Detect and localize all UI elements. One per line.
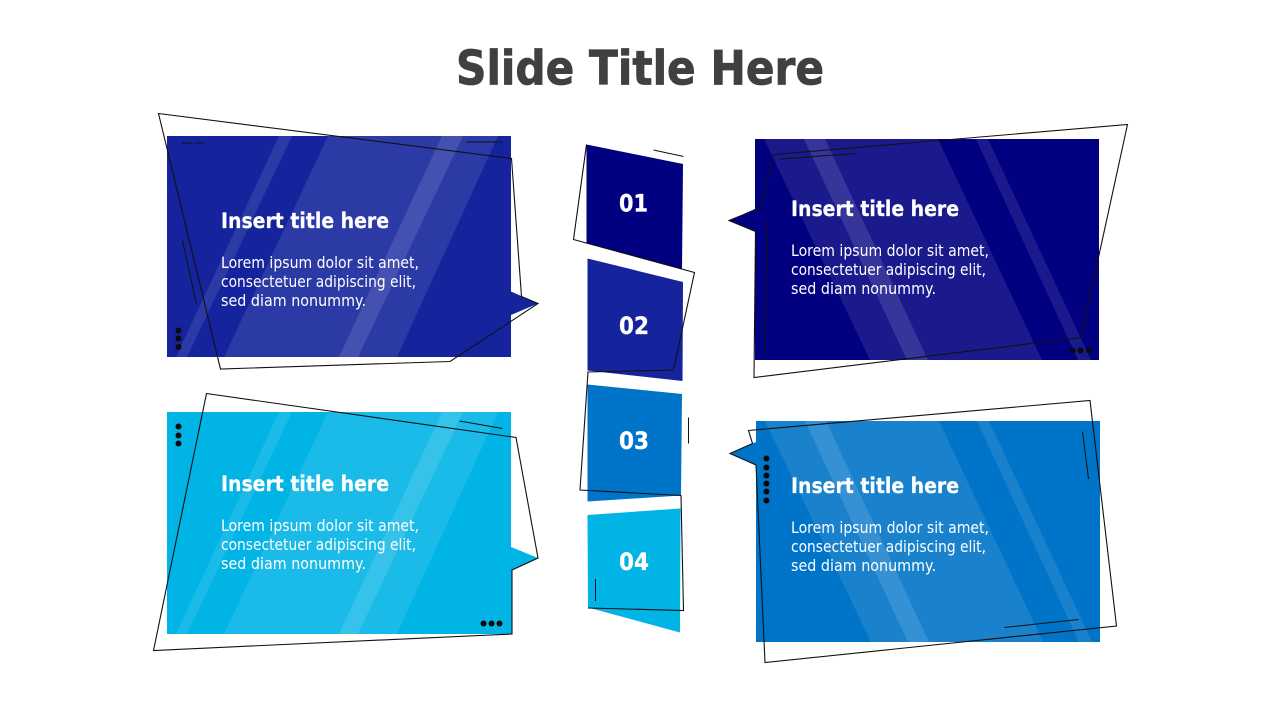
panel: top-left card	[158, 114, 538, 369]
card body text: sed diam nonummy.	[221, 291, 366, 310]
outline frame	[730, 400, 1116, 662]
glass bands	[176, 136, 498, 357]
accent lines	[765, 154, 855, 354]
outline frame	[154, 394, 538, 650]
card background with pointer	[167, 412, 538, 634]
card heading: Insert title here	[791, 197, 959, 221]
card body text: sed diam nonummy.	[221, 554, 366, 573]
card body text: consectetuer adipiscing elit,	[221, 272, 416, 291]
card background with pointer	[729, 139, 1099, 360]
card body text	[791, 241, 989, 298]
card body text	[791, 518, 989, 575]
panel: bottom-right card	[730, 400, 1116, 662]
outline frame	[729, 124, 1128, 378]
card body text: Lorem ipsum dolor sit amet,	[221, 253, 419, 272]
step outlines	[574, 144, 694, 610]
card body text: Lorem ipsum dolor sit amet,	[791, 518, 989, 537]
card heading: Insert title here	[791, 474, 959, 498]
card heading: Insert title here	[221, 209, 389, 233]
glass bands	[765, 421, 1092, 642]
step 03	[588, 384, 682, 502]
accent lines	[182, 142, 502, 304]
card body text	[221, 516, 419, 573]
center step column	[574, 144, 694, 632]
card body text: Lorem ipsum dolor sit amet,	[221, 516, 419, 535]
glass bands	[176, 412, 498, 634]
card body text: sed diam nonummy.	[791, 556, 936, 575]
card body text: consectetuer adipiscing elit,	[791, 260, 986, 279]
step 02	[588, 258, 683, 381]
glass bands	[764, 139, 1091, 360]
step 01	[586, 144, 683, 269]
card body text	[221, 253, 419, 310]
panel: bottom-left card	[154, 394, 538, 650]
card heading: Insert title here	[221, 472, 389, 496]
panel: top-right card	[729, 124, 1128, 378]
dots	[1070, 348, 1092, 354]
dots	[764, 456, 770, 504]
accent lines	[1004, 432, 1088, 628]
step 02: 02	[619, 312, 649, 340]
card background with pointer	[730, 421, 1100, 642]
outline frame	[158, 114, 538, 369]
card body text: Lorem ipsum dolor sit amet,	[791, 241, 989, 260]
step 04: 04	[619, 548, 649, 576]
title: Slide Title Here	[456, 42, 824, 96]
step 04	[588, 508, 680, 632]
card body text: sed diam nonummy.	[791, 279, 936, 298]
step 01: 01	[619, 190, 648, 218]
card body text: consectetuer adipiscing elit,	[221, 535, 416, 554]
dots	[176, 328, 182, 350]
dots	[176, 424, 502, 626]
accent line	[460, 421, 502, 428]
step 03: 03	[619, 427, 649, 455]
card body text: consectetuer adipiscing elit,	[791, 537, 986, 556]
card background with pointer	[167, 136, 538, 357]
